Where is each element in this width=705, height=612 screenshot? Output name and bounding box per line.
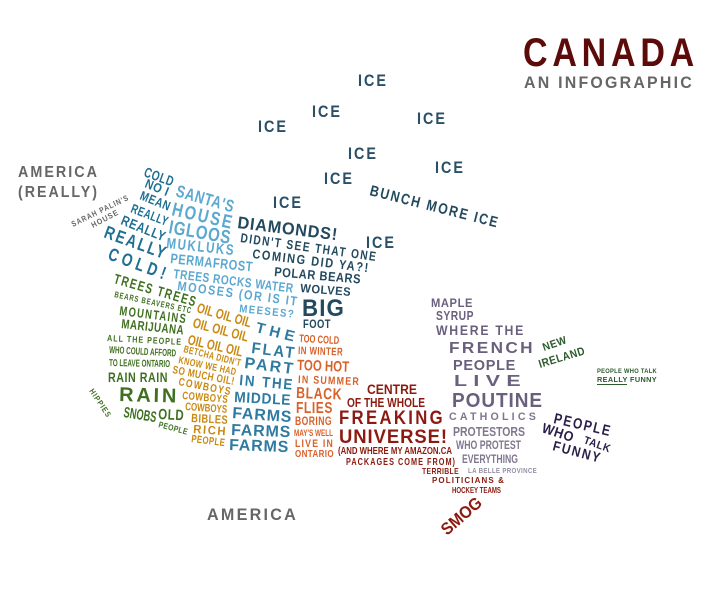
- text: in the: IN THE: [239, 372, 295, 394]
- text: no I: NO I: [143, 176, 172, 199]
- text: poutine: POUTINE: [452, 390, 543, 412]
- text: rich: RICH: [193, 422, 228, 438]
- label: ice 3: ICE: [258, 117, 288, 136]
- text: (Really): (REALLY): [18, 184, 99, 201]
- region: British Columbia, green: [87, 271, 199, 437]
- text: cold!: COLD!: [106, 244, 173, 285]
- text: meeses: MEESES?: [239, 303, 296, 321]
- text: bears beavers etc: BEARS BEAVERS ETC: [114, 289, 193, 315]
- text: old: OLD: [158, 406, 185, 424]
- text: people who talk: PEOPLE WHO TALK: [597, 368, 657, 375]
- label: Sarah Palin's house: [70, 193, 131, 230]
- text: universe!: UNIVERSE!: [339, 426, 448, 448]
- text: where the: WHERE THE: [436, 322, 525, 338]
- text: politicians &: POLITICIANS &: [432, 476, 505, 485]
- region: Northwest Territories, light blue: [166, 182, 300, 321]
- text: know we had: KNOW WE HAD: [177, 355, 237, 378]
- text: farms 3: FARMS: [229, 437, 289, 456]
- label: America south: AMERICA: [207, 505, 298, 524]
- text: foot: FOOT: [303, 317, 331, 331]
- text: wolves: WOLVES: [300, 281, 352, 299]
- text: of the whole: OF THE WHOLE: [347, 395, 425, 410]
- text: to leave Ontario: TO LEAVE ONTARIO: [109, 358, 170, 370]
- text: oil row 2: OIL OIL OIL: [191, 314, 251, 345]
- text: live in: LIVE IN: [295, 438, 334, 450]
- text: centre: CENTRE: [367, 381, 417, 397]
- text: people: PEOPLE: [453, 357, 516, 374]
- text: permafrost: PERMAFROST: [170, 250, 254, 275]
- text: middle: MIDDLE: [234, 389, 292, 409]
- label: bunch more ice: BUNCH MORE ICE: [368, 182, 501, 232]
- text: flat: FLAT: [251, 340, 297, 362]
- text: may's well: MAY'S WELL: [294, 428, 333, 439]
- label: ice 8: ICE: [273, 193, 303, 212]
- text: really medium: REALLY: [119, 212, 168, 244]
- text: protestors: PROTESTORS: [453, 424, 525, 439]
- subtitle: AN INFOGRAPHIC: [524, 73, 694, 92]
- text: cold: COLD: [142, 164, 177, 189]
- text: so much oil: SO MUCH OIL!: [171, 364, 236, 388]
- text: oil row 1: OIL OIL OIL: [195, 300, 254, 330]
- text: trees trees: TREES TREES: [112, 271, 199, 310]
- text: too cold: TOO COLD: [299, 333, 339, 347]
- label: ice 1: ICE: [358, 71, 388, 90]
- text: bibles: BIBLES: [191, 411, 229, 427]
- text: new: NEW: [541, 334, 569, 354]
- text: mean: MEAN: [138, 188, 173, 214]
- text: the: THE: [254, 319, 301, 347]
- text: rain: RAIN: [119, 384, 179, 408]
- region: Nunavut, dark blue: [237, 213, 378, 331]
- region: Maritimes, dark purple: [540, 410, 613, 466]
- label: America (really): [18, 164, 99, 201]
- text: people: PEOPLE: [157, 419, 189, 437]
- text: polar bears: POLAR BEARS: [274, 264, 362, 287]
- text: people: PEOPLE: [191, 433, 226, 449]
- text: hockey teams: HOCKEY TEAMS: [452, 486, 502, 495]
- text: and where my amazon.ca: (AND WHERE MY AMAZON.CA: [338, 446, 452, 457]
- text: funny: FUNNY: [551, 437, 604, 466]
- text: Santa's: SANTA'S: [174, 182, 237, 216]
- region: arctic ice: [258, 71, 501, 252]
- text: mooses or is it: MOOSES (OR IS IT: [177, 278, 300, 309]
- text: snobs: SNOBS: [122, 404, 158, 426]
- text: didn't see that one: DIDN'T SEE THAT ONE: [240, 230, 378, 264]
- label: ice 6: ICE: [435, 158, 465, 177]
- text: everything: EVERYTHING: [462, 452, 518, 466]
- text: part: PART: [244, 355, 296, 378]
- text: talk: TALK: [582, 435, 612, 455]
- text: la belle province: LA BELLE PROVINCE: [468, 466, 537, 475]
- callout: people who talk really funny: [597, 368, 657, 385]
- text: diamonds: DIAMONDS!: [237, 213, 339, 244]
- text: marijuana: MARIJUANA: [121, 316, 185, 338]
- text: who: WHO: [540, 420, 576, 445]
- text: french: FRENCH: [449, 340, 535, 357]
- text: trees rocks water: TREES ROCKS WATER: [173, 266, 295, 296]
- text: Ontario: ONTARIO: [295, 448, 334, 460]
- region: Alberta, gold: [171, 300, 254, 449]
- text: ireland: IRELAND: [537, 345, 587, 371]
- text: big: BIG: [302, 295, 345, 322]
- text: terrible: TERRIBLE: [422, 466, 459, 476]
- text: oil row 3: OIL OIL OIL: [186, 331, 245, 360]
- text: rain rain: RAIN RAIN: [108, 369, 168, 385]
- text: farms 1: FARMS: [232, 405, 293, 426]
- region: Newfoundland: [537, 334, 587, 371]
- text: in winter: IN WINTER: [298, 345, 343, 359]
- text: really large: REALLY: [102, 222, 170, 263]
- text: cowboys 2: COWBOYS: [182, 390, 229, 406]
- text: black: BLACK: [296, 385, 342, 404]
- text: cowboys 1: COWBOYS: [177, 376, 233, 398]
- text: people: PEOPLE: [552, 410, 613, 440]
- text: boring: BORING: [295, 414, 332, 428]
- text: mukluks: MUKLUKS: [166, 235, 236, 259]
- text: hippies: HIPPIES: [87, 387, 113, 419]
- region: Manitoba, orange: [294, 333, 360, 460]
- text: in summer: IN SUMMER: [298, 374, 360, 388]
- text: coming did ya: COMING DID YA?!: [252, 246, 371, 275]
- label: ice 2: ICE: [312, 102, 342, 121]
- label: ice 5: ICE: [348, 144, 378, 163]
- text: live: LIVE: [454, 373, 527, 390]
- text: who protest: WHO PROTEST: [456, 438, 521, 452]
- label: ice 7: ICE: [324, 169, 354, 188]
- text: betcha didn't: BETCHA DIDN'T: [182, 344, 242, 369]
- region: Quebec, purple: [431, 296, 543, 475]
- title block: [523, 31, 699, 92]
- text: Sarah Palin's: SARAH PALIN'S: [70, 193, 131, 229]
- region: Saskatchewan, mid blue: [229, 319, 301, 456]
- text: flies: FLIES: [296, 400, 333, 417]
- text: America: AMERICA: [18, 164, 99, 181]
- text: mountains: MOUNTAINS: [119, 303, 188, 326]
- text: really small: REALLY: [129, 201, 171, 229]
- label: ice 4: ICE: [417, 109, 447, 128]
- text: freaking: FREAKING: [339, 407, 445, 429]
- text: too hot: TOO HOT: [297, 357, 349, 376]
- text: catholics: CATHOLICS: [449, 411, 539, 423]
- text: farms 2: FARMS: [231, 422, 291, 441]
- label: ice 9: ICE: [366, 233, 396, 252]
- text: house: HOUSE: [90, 208, 120, 230]
- region: Yukon, really cold: [102, 164, 177, 285]
- text: syrup: SYRUP: [436, 309, 474, 323]
- text: packages come from: PACKAGES COME FROM): [346, 457, 456, 468]
- region: Ontario, dark red: [338, 381, 505, 539]
- text: igloos: IGLOOS: [167, 217, 233, 249]
- text: all the people: ALL THE PEOPLE: [107, 333, 182, 347]
- text: house: HOUSE: [170, 199, 236, 234]
- text: cowboys 3: COWBOYS: [185, 401, 228, 416]
- text: smog: SMOG: [437, 493, 486, 539]
- text: maple: MAPLE: [431, 296, 473, 310]
- text: who could afford: WHO COULD AFFORD: [109, 345, 176, 360]
- text: really funny: REALLY FUNNY: [597, 375, 657, 384]
